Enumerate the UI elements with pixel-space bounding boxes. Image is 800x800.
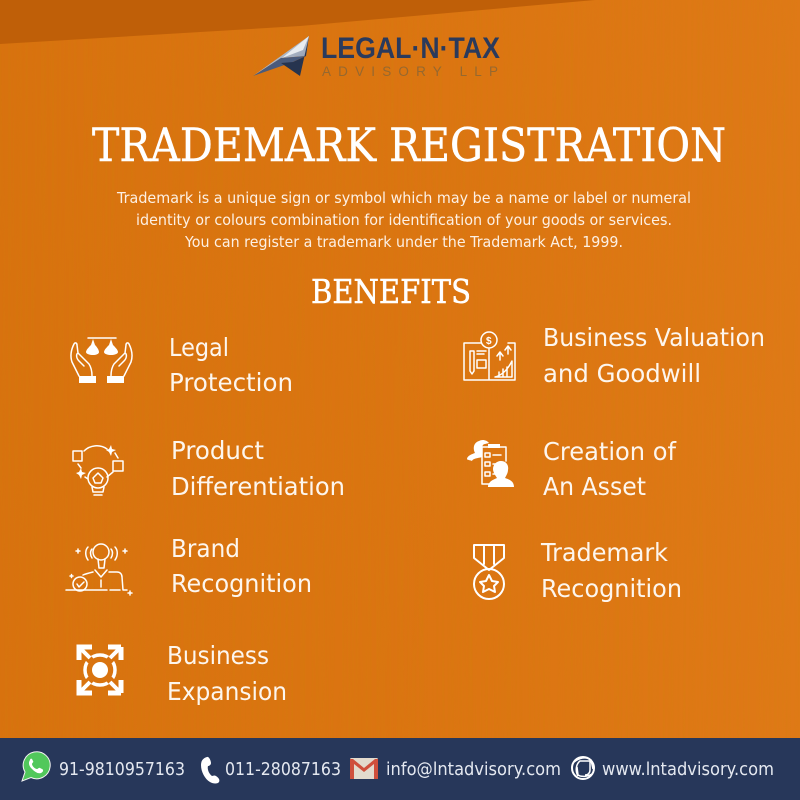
label: Business Valuation [543, 323, 765, 352]
icon: book with charts [464, 332, 515, 380]
benefit: business valuation and goodwill [464, 323, 765, 388]
benefit: legal protection: Protection [169, 368, 293, 397]
logo subtitle: ADVISORY LLP [322, 64, 498, 79]
intro text: identity or colours combination for identification of your goods or services. [136, 211, 672, 229]
benefit: brand recognition: Recognition [171, 569, 312, 598]
benefit: business expansion: Expansion [167, 677, 287, 706]
benefit: trademark recognition [474, 538, 682, 603]
email: info@lntadvisory.com [386, 760, 561, 780]
icon: bulb with boxes [73, 445, 123, 495]
label: Business [167, 641, 269, 670]
logo wordmark: LEGAL·N·TAX [321, 32, 500, 65]
icon: person with idea [66, 544, 132, 595]
icon: paper plane [253, 36, 309, 76]
benefit: legal protection [71, 333, 293, 397]
icon: globe [572, 757, 594, 779]
landline number: 011-28087163 [225, 760, 341, 780]
icon: mail [350, 758, 378, 779]
benefit: brand recognition [66, 534, 312, 598]
heading: benefits: BENEFITS [311, 272, 471, 311]
label: Legal [169, 333, 229, 362]
label: Product [171, 436, 264, 465]
benefit: product differentiation: Differentiation [171, 472, 345, 501]
footer bar [0, 738, 800, 800]
benefit: business valuation and goodwill: and Goodwill [543, 359, 701, 388]
icon: expand target [79, 647, 121, 693]
label: Brand [171, 534, 240, 563]
icon: phone [201, 757, 219, 784]
label: Trademark [540, 538, 669, 567]
benefit: business expansion [79, 641, 287, 706]
icon: whatsapp [22, 752, 50, 781]
icon: scales in hands [71, 338, 132, 383]
icon: book with charts: $ [486, 336, 492, 347]
benefit: product differentiation [73, 436, 345, 501]
benefit: creation of an asset: An Asset [543, 472, 646, 501]
benefit: creation of an asset [467, 437, 677, 501]
label: Creation of [543, 437, 677, 466]
website: www.lntadvisory.com [602, 760, 774, 780]
intro text: Trademark is a unique sign or symbol which may be a name or label or numeral [116, 189, 691, 207]
top corner band [0, 0, 595, 44]
intro text [116, 189, 691, 251]
icon: medal [474, 545, 504, 599]
phone number: 91-9810957163 [59, 760, 185, 780]
intro text: You can register a trademark under the Trademark Act, 1999. [184, 233, 623, 251]
title: TRADEMARK REGISTRATION [92, 118, 726, 172]
icon: clipboard and person [467, 440, 514, 487]
logo [253, 32, 500, 79]
benefit: trademark recognition: Recognition [541, 574, 682, 603]
